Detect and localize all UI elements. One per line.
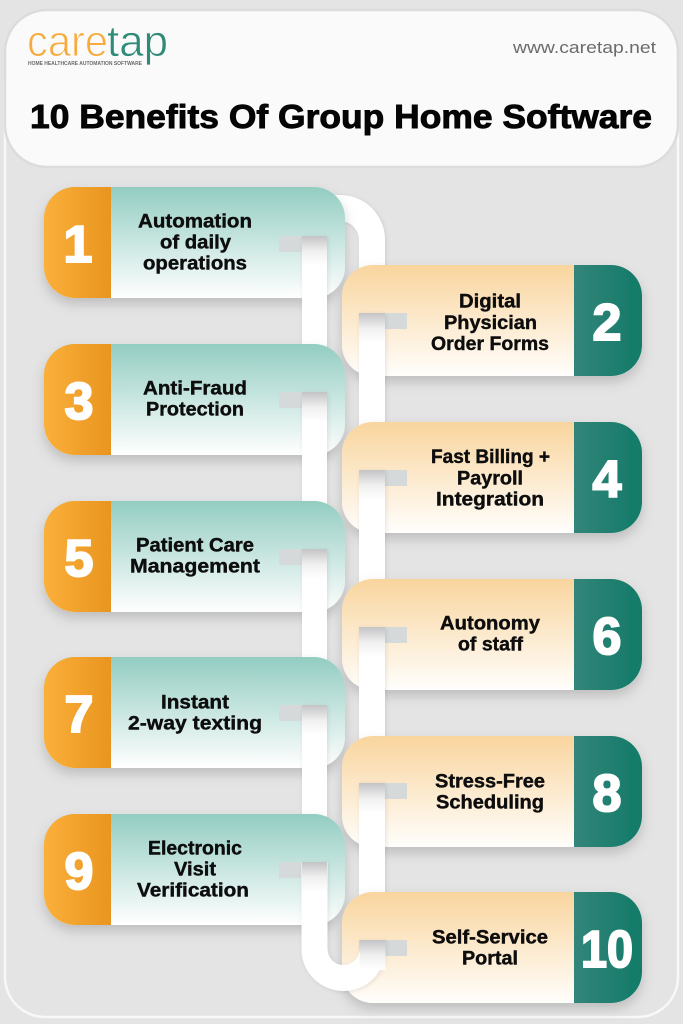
card 6: of staff xyxy=(458,634,524,655)
card 7: 2-way texting xyxy=(128,713,262,734)
card 1: of daily xyxy=(160,232,231,253)
card 4: Integration xyxy=(436,489,544,510)
card 7: 7 xyxy=(65,686,93,744)
card 3 xyxy=(44,344,345,455)
connector 3 to 5 xyxy=(279,392,327,512)
card 3: Anti-Fraud xyxy=(143,378,247,399)
card 4: Payroll xyxy=(457,468,523,489)
card 2: Order Forms xyxy=(431,334,549,355)
website url: www.caretap.net xyxy=(512,39,656,57)
card 8 xyxy=(342,736,642,847)
card 10: 10 xyxy=(581,921,633,979)
card 9: Verification xyxy=(137,880,249,901)
card 10: Self-Service xyxy=(432,927,548,948)
card 5: Management xyxy=(130,556,261,577)
card 2: Digital xyxy=(459,291,521,312)
card 3: Protection xyxy=(146,399,244,420)
connector: bottom arc xyxy=(302,862,386,978)
card 8: Scheduling xyxy=(436,792,544,813)
card 2 xyxy=(342,265,642,376)
card 1 xyxy=(44,187,345,298)
card 1: 1 xyxy=(64,216,92,274)
card 7 xyxy=(44,657,345,768)
card 2: 2 xyxy=(593,294,621,352)
logo: care xyxy=(27,17,108,66)
card 10 xyxy=(342,892,642,1003)
card 6: 6 xyxy=(593,608,621,666)
card 9 xyxy=(44,814,345,925)
logo: tap xyxy=(107,17,168,66)
card 2: Physician xyxy=(444,313,537,334)
connector 6 to 8 xyxy=(359,627,407,747)
connector 5 to 7 xyxy=(279,549,327,669)
card 4: 4 xyxy=(593,451,622,509)
card 10: Portal xyxy=(462,948,518,969)
card 9: 9 xyxy=(65,843,93,901)
slot on card 9 xyxy=(279,862,327,878)
connector 1 to 3 xyxy=(279,236,327,356)
card 5: 5 xyxy=(65,530,93,588)
title: 10 Benefits Of Group Home Software xyxy=(30,98,652,135)
card 5: Patient Care xyxy=(136,535,254,556)
card 6 xyxy=(342,579,642,690)
card 7: Instant xyxy=(161,692,230,713)
card 8: 8 xyxy=(593,765,621,823)
card 4 xyxy=(342,422,642,533)
card 6: Autonomy xyxy=(440,613,540,634)
panel: header xyxy=(5,10,678,167)
card 4: Fast Billing + xyxy=(431,447,550,468)
card 1: Automation xyxy=(138,211,252,232)
connector 7 to 9 xyxy=(279,705,327,825)
connector: top arc xyxy=(335,208,372,280)
card 8: Stress-Free xyxy=(435,771,545,792)
card 3: 3 xyxy=(65,373,93,431)
slot on card 10 xyxy=(359,940,407,956)
connector 8 to 10 xyxy=(359,783,407,903)
card 5 xyxy=(44,501,345,612)
card 9: Electronic xyxy=(148,838,242,859)
card 1: operations xyxy=(143,253,247,274)
card 9: Visit xyxy=(174,859,217,880)
logo: HOME HEALTHCARE AUTOMATION SOFTWARE xyxy=(28,61,142,67)
connector 2 to 4 xyxy=(359,313,407,433)
logo xyxy=(27,17,168,67)
connector 4 to 6 xyxy=(359,470,407,590)
